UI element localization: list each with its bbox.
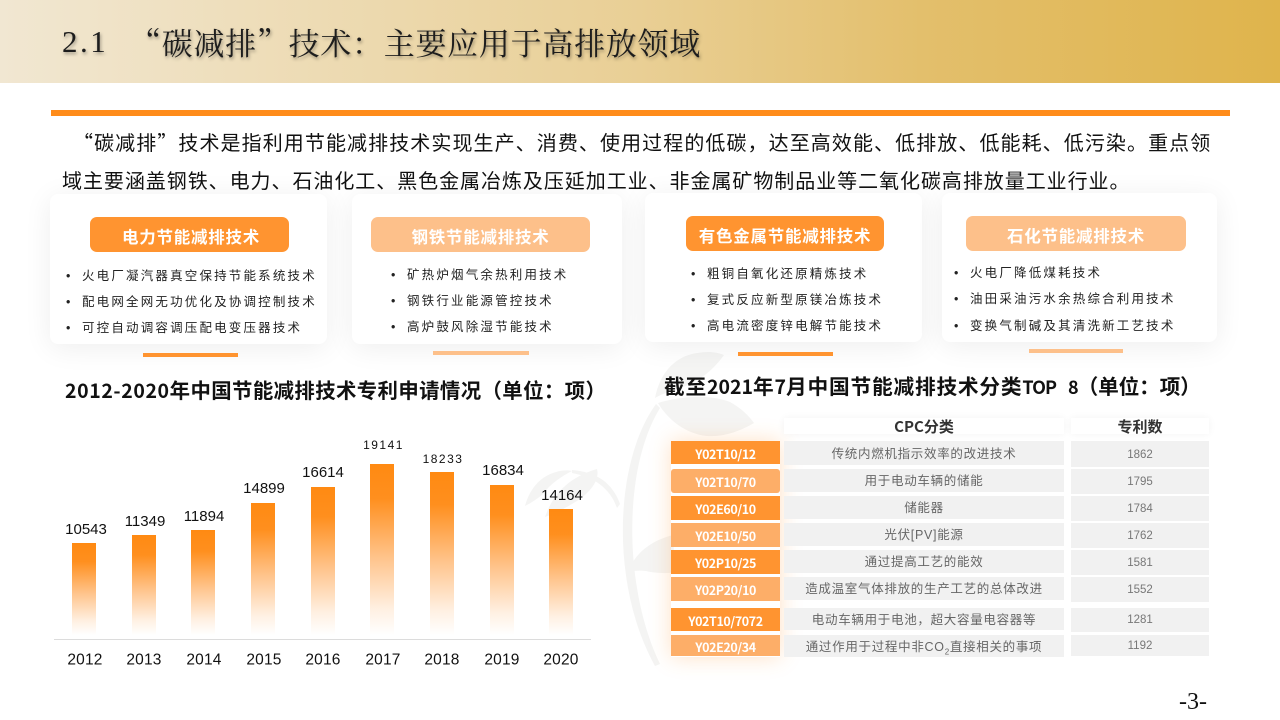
list: steel: 高炉鼓风除湿节能技术 [407, 320, 554, 334]
row 7: Y02T10/7072 [688, 611, 763, 630]
heading: nonferrous: 有色金属节能减排技术 [699, 228, 871, 246]
table: top 8 CPC [660, 430, 792, 668]
row 8: 1192 [1128, 640, 1152, 652]
heading: steel [371, 217, 590, 252]
row 2 [671, 469, 1209, 494]
list: nonferrous: 粗铜自氧化还原精炼技术 [707, 267, 868, 281]
row 1: Y02T10/12 [695, 444, 756, 463]
list: petrochemical: 火电厂降低煤耗技术 [970, 266, 1102, 280]
panel: nonferrous: • [691, 319, 695, 333]
title: “碳减排”技术：主要应用于高排放领域 [130, 19, 701, 64]
panel: nonferrous [645, 193, 922, 342]
row 2: 1795 [1127, 476, 1153, 488]
panel: nonferrous: • [691, 267, 695, 281]
bar chart: patent applications: 2012 [67, 652, 103, 668]
accent: power [143, 353, 238, 357]
row 5: Y02P10/25 [695, 553, 756, 572]
heading: nonferrous [686, 216, 884, 251]
bar chart: patent applications: 2014 [186, 652, 222, 668]
panel: power: • [66, 321, 70, 335]
intro text: “碳减排”技术是指利用节能减排技术实现生产、消费、使用过程的低碳，达至高效能、低排放、低能耗、低污染。重点领 [73, 127, 1211, 156]
row 1: 1862 [1127, 449, 1153, 461]
bar chart: patent applications: 11349 [125, 513, 165, 530]
accent: nonferrous [738, 352, 833, 356]
panel: petrochemical: • [954, 292, 958, 306]
list: steel: 钢铁行业能源管控技术 [407, 294, 554, 308]
panel: power [50, 194, 327, 344]
header band [0, 0, 1280, 83]
list: power: 可控自动调容调压配电变压器技术 [82, 321, 302, 335]
row 7 [671, 608, 1209, 632]
list: steel: 矿热炉烟气余热利用技术 [407, 268, 568, 282]
table header: 专利数 [1117, 416, 1162, 437]
row 6 [671, 577, 1209, 602]
list: steel [391, 268, 568, 334]
bar chart: patent applications: 2013 [126, 652, 162, 668]
row 1 [671, 441, 1209, 467]
list: nonferrous: 复式反应新型原镁冶炼技术 [707, 293, 883, 307]
list: nonferrous: 高电流密度锌电解节能技术 [707, 319, 883, 333]
bar chart: patent applications: 18233 [423, 452, 463, 466]
heading: steel: 钢铁节能减排技术 [412, 229, 550, 247]
row 3: 1784 [1127, 503, 1153, 515]
list: power: 火电厂凝汽器真空保持节能系统技术 [82, 269, 317, 283]
bar chart: patent applications: 16614 [302, 464, 344, 481]
row 5 [671, 550, 1209, 575]
orange divider bar [51, 110, 1230, 116]
row 6: 造成温室气体排放的生产工艺的总体改进 [805, 582, 1043, 596]
panel: steel: • [391, 294, 395, 308]
row 7: 1281 [1127, 614, 1153, 626]
label column glow [671, 441, 780, 657]
heading: petrochemical [966, 216, 1186, 251]
heading: power [90, 217, 289, 252]
title: 2.1 [62, 24, 108, 59]
row 3 [671, 496, 1209, 521]
page number: -3- [1179, 689, 1207, 715]
list: petrochemical [954, 266, 1176, 333]
row 4: 光伏[PV]能源 [884, 528, 964, 542]
panel: nonferrous: • [691, 293, 695, 307]
row 4: Y02E10/50 [695, 526, 756, 545]
intro text [62, 127, 1211, 194]
row 2: 用于电动车辆的储能 [865, 474, 983, 488]
row 8 [671, 635, 1209, 657]
heading: patent chart: 2012-2020年中国节能减排技术专利申请情况（单位：项） [65, 374, 606, 404]
row 2: Y02T10/70 [695, 472, 756, 491]
panel: petrochemical: • [954, 319, 958, 333]
bar chart: patent applications: 2015 [246, 652, 282, 668]
row 8: 通过作用于过程中非CO2直接相关的事项 [806, 640, 1042, 656]
panel: steel [352, 194, 622, 344]
bar chart: patent applications: 14899 [243, 480, 285, 497]
list: petrochemical: 变换气制碱及其清洗新工艺技术 [970, 319, 1176, 333]
panel: power: • [66, 295, 70, 309]
row 6: 1552 [1127, 584, 1153, 596]
bar chart: patent applications: 16834 [482, 462, 524, 479]
panel: petrochemical [942, 193, 1217, 342]
list: petrochemical: 油田采油污水余热综合利用技术 [970, 292, 1176, 306]
intro text: 域主要涵盖钢铁、电力、石油化工、黑色金属冶炼及压延加工业、非金属矿物制品业等二氧化碳高排放量工业行业。 [62, 165, 1130, 194]
row 1: 传统内燃机指示效率的改进技术 [832, 447, 1016, 461]
bar chart: patent applications: 19141 [363, 438, 404, 452]
bar chart: patent applications: 2016 [305, 652, 341, 668]
list: power: 配电网全网无功优化及协调控制技术 [82, 295, 317, 309]
row 4 [671, 523, 1209, 548]
table header [894, 416, 1162, 437]
panel: petrochemical: • [954, 266, 958, 280]
list: power [66, 269, 317, 335]
accent: steel [433, 351, 529, 355]
bar chart: patent applications: 10543 [65, 521, 107, 538]
row 8: Y02E20/34 [695, 637, 756, 656]
bar chart: patent applications: 2020 [543, 652, 579, 668]
panel: power: • [66, 269, 70, 283]
row 5: 1581 [1127, 557, 1153, 569]
panel: steel: • [391, 268, 395, 282]
row 5: 通过提高工艺的能效 [865, 555, 983, 569]
heading: petrochemical: 石化节能减排技术 [1007, 228, 1145, 246]
bar chart: patent applications: 2018 [424, 652, 460, 668]
bar chart: patent applications: 11894 [184, 508, 224, 525]
row 7: 电动车辆用于电池，超大容量电容器等 [812, 613, 1036, 627]
table header: CPC分类 [894, 416, 954, 437]
panel: steel: • [391, 320, 395, 334]
heading: power: 电力节能减排技术 [122, 229, 260, 247]
bar chart: patent applications [54, 438, 591, 668]
row 3: 储能器 [904, 501, 944, 515]
row 3: Y02E60/10 [695, 499, 756, 518]
bar chart: patent applications: 2017 [365, 652, 401, 668]
row 6: Y02P20/10 [695, 580, 756, 599]
bar chart: patent applications: 14164 [541, 487, 583, 504]
accent: petrochemical [1029, 349, 1123, 353]
row 4: 1762 [1127, 530, 1153, 542]
bar chart: patent applications: 2019 [484, 652, 520, 668]
list: nonferrous [691, 267, 883, 333]
heading: top 8 table: 截至2021年7月中国节能减排技术分类TOP 8（单位：项） [664, 370, 1201, 400]
